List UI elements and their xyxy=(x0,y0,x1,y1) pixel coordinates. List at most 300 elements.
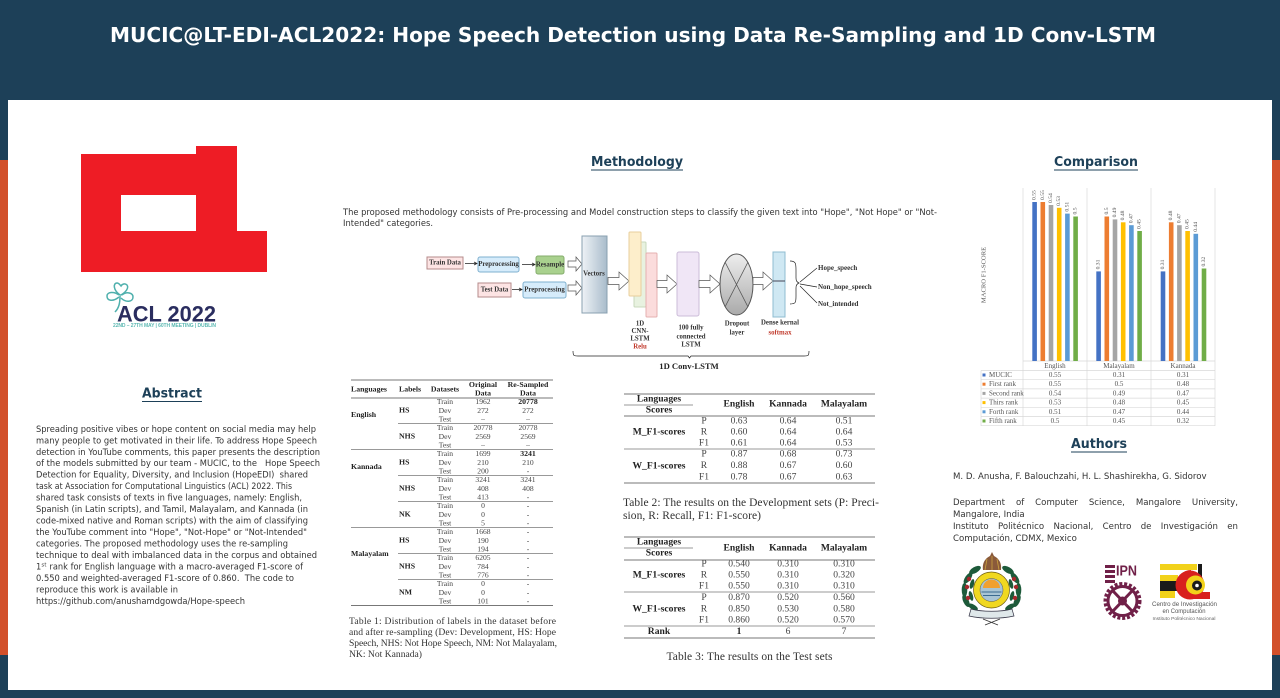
table 3: test results: 0.320 xyxy=(833,570,855,580)
text block: abstract: code-mixed native and Roman scripts) with the aim of classifying xyxy=(36,517,308,527)
table 3: test results: F1 xyxy=(699,580,709,592)
heading: Comparison: Comparison xyxy=(1054,155,1138,170)
label: 1D CNN-LSTM xyxy=(630,320,650,350)
bars: Kannada: 0.45 xyxy=(1185,219,1191,229)
table 3: test results: 0.540 xyxy=(728,558,750,570)
table 2 caption: Table 2: The results on the Development sets (P: Preci- xyxy=(623,497,879,509)
table 2: development results: 0.64 xyxy=(836,426,853,438)
table 1: label distribution: Test xyxy=(439,596,452,606)
table 1: label distribution: 200 xyxy=(477,466,489,476)
table 1: label distribution: NM xyxy=(399,588,413,596)
chart data table xyxy=(982,362,1196,425)
table 3: test results: 0.520 xyxy=(777,592,799,603)
label: 100 fully connected LSTM: LSTM xyxy=(681,342,701,348)
table 1: label distribution: Data xyxy=(520,388,536,398)
bars: Malayalam: 0.48 xyxy=(1120,210,1126,220)
table 1: label distribution: HS xyxy=(399,406,409,414)
table 1: label distribution: 194 xyxy=(477,544,489,554)
table 1 caption xyxy=(349,616,557,660)
table 3: test results: 0.580 xyxy=(833,604,855,614)
table 1: label distribution: 1699 xyxy=(475,449,491,458)
table 1: label distribution: Dev xyxy=(439,510,452,519)
label: 1D CNN-LSTM: Relu xyxy=(633,344,647,350)
label: 100 fully connected LSTM: connected xyxy=(676,334,706,340)
chart data table: 0.55 xyxy=(1049,380,1062,388)
table 3: test results: 0.860 xyxy=(728,614,750,626)
bars: English: 0.5 xyxy=(1073,207,1079,214)
black bars xyxy=(1160,564,1202,591)
table 1: label distribution: HS xyxy=(399,458,409,466)
table 1: label distribution: - xyxy=(527,527,530,536)
text block: abstract: technique to deal with imbalanced data in the corpus and obtained xyxy=(36,551,317,561)
table 1: label distribution: Labels xyxy=(399,384,421,394)
preprocessing box xyxy=(523,282,566,298)
table 3: test results: Kannada xyxy=(769,542,807,554)
table 2: development results: 0.67 xyxy=(780,460,797,471)
text block: abstract: Spreading positive vibes or hope content on social media may help xyxy=(36,425,316,435)
ACL 2022 dates: 22ND – 27TH MAY | 60TH MEETING | DUBLIN xyxy=(113,323,216,329)
table 3: test results: R xyxy=(701,570,708,580)
red C xyxy=(1176,570,1210,599)
table 3: test results: 7 xyxy=(842,626,847,637)
chart data table: English xyxy=(1044,362,1066,370)
table 3: test results: 6 xyxy=(786,626,791,637)
bars: English: 0.53 xyxy=(1056,196,1062,206)
white eye xyxy=(1195,584,1199,587)
table 3: test results: 0.530 xyxy=(777,604,799,614)
table 3: test results: P xyxy=(701,558,707,570)
output labels: Hope_speech xyxy=(818,264,857,272)
table 3: test results: M_F1-scores xyxy=(633,570,686,580)
authors and affiliations text xyxy=(953,472,1238,544)
table 3: test results: 0.310 xyxy=(777,580,799,592)
affiliation: IPN: Instituto Politécnico Nacional, Centro de Investigación en xyxy=(953,522,1238,532)
test data box: Test Data xyxy=(481,286,509,294)
ACL 2022 logo xyxy=(107,283,216,329)
label: 1D Conv-LSTM: 1D Conv-LSTM xyxy=(659,361,719,371)
table 1: label distribution: 408 xyxy=(522,484,534,493)
crown xyxy=(983,552,1001,570)
bars: Malayalam: 0.31 xyxy=(1096,259,1102,269)
bars: Kannada xyxy=(1160,210,1207,361)
text block: abstract: the YouTube comment into "Hope", "Not-Hope" or "Not-Intended" xyxy=(36,528,307,538)
text block: abstract: https://github.com/anushamdgowda/Hope-speech xyxy=(36,597,245,607)
table 1: label distribution: English xyxy=(351,410,377,419)
text block: abstract: 0.550 and weighted-averaged F1-score of 0.860. The code to xyxy=(36,574,294,584)
bars: English: 0.51 xyxy=(1064,202,1070,212)
table 1: label distribution: Dev xyxy=(439,406,452,415)
bars: English: 0.55 xyxy=(1032,190,1038,200)
table 2: development results: 0.61 xyxy=(731,438,748,448)
hollow arrow xyxy=(568,281,582,295)
label: dropout layer: layer xyxy=(730,330,744,336)
table 1: label distribution: - xyxy=(527,501,530,510)
chart data table: 0.45 xyxy=(1177,399,1190,407)
table 3: test results: Scores xyxy=(646,548,672,558)
table 1: label distribution: 1668 xyxy=(475,527,491,536)
chart data table: First rank xyxy=(989,380,1017,388)
resample box xyxy=(536,256,564,274)
heading: Authors: Authors xyxy=(1071,437,1127,452)
text block: abstract: Spanish (in Latin scripts), and Tamil, Malayalam, and Kannada (in xyxy=(36,505,308,515)
table 2: development results: 0.88 xyxy=(731,460,748,471)
label: dense kernal softmax: Dense kernal xyxy=(761,320,799,326)
table 3: test results: Malayalam xyxy=(821,542,867,554)
table 1: label distribution: - xyxy=(527,518,530,528)
black disc xyxy=(1192,580,1202,590)
table 1: label distribution: Languages xyxy=(351,384,387,394)
table 1: label distribution: 408 xyxy=(477,484,489,493)
table 2: development results: 0.64 xyxy=(780,416,797,426)
chart data table: 0.54 xyxy=(1049,389,1062,397)
table 1: label distribution: Dev xyxy=(439,588,452,597)
vectors block xyxy=(582,236,607,313)
table 2: development results: 0.51 xyxy=(836,416,853,426)
table 1: label distribution: Train xyxy=(437,475,453,484)
table 3: test results: 0.310 xyxy=(777,558,799,570)
table 1: label distribution: 210 xyxy=(522,458,534,467)
text block: abstract: detection in YouTube comments, this paper presents the description xyxy=(36,448,320,458)
text block: abstract: 1ˢᵗ rank for English language with a macro-averaged F1-score of xyxy=(36,562,304,572)
table 1: label distribution: Re-Sampled xyxy=(508,380,549,389)
bars: Malayalam: 0.5 xyxy=(1104,207,1110,214)
table 2: development results: 0.67 xyxy=(780,472,797,482)
bars: Kannada: 0.31 xyxy=(1160,259,1166,269)
table 2: development results: P xyxy=(701,448,707,460)
label: 1D CNN-LSTM: LSTM xyxy=(630,336,650,342)
label: 1D CNN-LSTM: 1D xyxy=(636,320,644,328)
chart data table: 0.48 xyxy=(1177,380,1190,388)
table 1: label distribution: 3241 xyxy=(520,475,536,484)
table 1: label distribution: 6205 xyxy=(475,553,491,562)
table 1: label distribution: Train xyxy=(437,397,453,406)
table 1 caption: Speech, NHS: Not Hope Speech, NM: Not Malayalam, xyxy=(349,638,557,649)
table 3: test results: 0.550 xyxy=(728,570,750,580)
label: dropout layer xyxy=(725,320,750,336)
chart data table: 0.44 xyxy=(1177,408,1190,416)
chart data table: MUCIC xyxy=(989,371,1012,379)
chart data table: 0.47 xyxy=(1113,408,1126,416)
table 3: test results: F1 xyxy=(699,614,709,626)
dropout ellipse xyxy=(720,254,753,315)
table 1: label distribution: 20778 xyxy=(474,423,493,432)
table 1: label distribution: 1962 xyxy=(475,397,491,406)
text block: abstract: shared task consists of texts in five languages, namely: English, xyxy=(36,494,302,504)
affiliation: Mangalore: Department of Computer Science, Mangalore University, xyxy=(953,498,1238,508)
table 3: test results: 0.310 xyxy=(777,570,799,580)
chart data table: 0.32 xyxy=(1177,417,1190,425)
table 1: label distribution: Dev xyxy=(439,458,452,467)
author names: M. D. Anusha, F. Balouchzahi, H. L. Shashirekha, G. Sidorov xyxy=(953,472,1207,482)
test data box xyxy=(478,283,511,297)
table 1: label distribution: Dev xyxy=(439,536,452,545)
bars: Malayalam: 0.47 xyxy=(1128,213,1134,223)
chart data table: Kannada xyxy=(1171,362,1196,370)
arrow xyxy=(522,263,535,266)
table 1: label distribution: Data xyxy=(475,388,491,398)
label: dense kernal softmax xyxy=(761,320,799,336)
CIC wordmark xyxy=(1152,602,1217,622)
model architecture diagram xyxy=(427,232,872,371)
table 1: label distribution: Train xyxy=(437,423,453,432)
CIC wordmark: Centro de Investigación xyxy=(1152,602,1217,608)
gear center xyxy=(1113,591,1132,611)
chart data table: Thirs rank xyxy=(989,399,1018,407)
bars: English: 0.55 xyxy=(1040,190,1046,200)
table 1: label distribution: 20778 xyxy=(519,423,538,432)
table 1: label distribution: - xyxy=(527,536,530,545)
table 2: development results: Kannada xyxy=(769,398,807,410)
bar chart: macro F1-score comparison xyxy=(980,188,1215,426)
crossed stems xyxy=(983,619,1000,625)
output brace xyxy=(790,261,799,304)
table 1 caption: NK: Not Kannada) xyxy=(349,649,422,660)
table 1 caption: and after re-sampling (Dev: Development, HS: Hope xyxy=(349,627,556,638)
table 3: test results: Rank xyxy=(648,626,671,637)
table 1: label distribution: 0 xyxy=(481,510,485,519)
berries xyxy=(965,577,1018,600)
table 3: test results: 0.850 xyxy=(728,604,750,614)
table 2: development results: W_F1-scores xyxy=(632,460,686,472)
chart data table: 0.31 xyxy=(1113,371,1126,379)
table 2: development results: P xyxy=(701,416,707,426)
green layer xyxy=(634,242,646,307)
table 1: label distribution: Train xyxy=(437,527,453,536)
table 1: label distribution: Test xyxy=(439,544,452,554)
chart data table: 0.31 xyxy=(1177,371,1190,379)
table 3: test results: R xyxy=(701,604,708,614)
table 1: label distribution: 210 xyxy=(477,458,489,467)
table 3: test results: Languages xyxy=(637,536,681,548)
train data box xyxy=(427,257,463,269)
table 1: label distribution: Dev xyxy=(439,432,452,441)
preprocessing box xyxy=(478,257,519,272)
table 1: label distribution: - xyxy=(527,510,530,519)
table 3 caption: Table 3: The results on the Test sets xyxy=(666,651,833,663)
train data box: Train Data xyxy=(429,260,461,266)
table 1: label distribution: 3241 xyxy=(520,449,536,458)
affiliation: IPN continued: Computación, CDMX, Mexico xyxy=(953,534,1077,544)
table 2: development results: 0.60 xyxy=(731,426,748,438)
table 1: label distribution: - xyxy=(527,596,530,606)
inner seal xyxy=(980,578,1003,602)
text block: methodology intro: The proposed methodology consists of Pre-processing and Model construction steps to classify the given text into "Hope", "Not Hope" or "Not- xyxy=(342,208,937,218)
table 1: label distribution: Dev xyxy=(439,484,452,493)
bars: Kannada: 0.47 xyxy=(1176,213,1182,223)
table 2 caption xyxy=(623,497,879,522)
text block: abstract: categories. The proposed methodology uses the re-sampling xyxy=(36,540,288,550)
table 3: test results: 1 xyxy=(737,626,742,637)
yellow seal xyxy=(974,572,1010,608)
bars: English xyxy=(1032,190,1079,361)
output labels: Non_hope_speech xyxy=(818,283,872,291)
table 1: label distribution: Test xyxy=(439,414,452,424)
chart data table: 0.48 xyxy=(1113,399,1126,407)
table 1: label distribution: Test xyxy=(439,466,452,476)
chart data table: 0.45 xyxy=(1113,417,1126,425)
hollow arrow xyxy=(657,275,677,293)
chart data table: 0.51 xyxy=(1049,408,1062,416)
table 1: label distribution: Train xyxy=(437,579,453,588)
bars: Malayalam xyxy=(1096,207,1143,361)
title: MUCIC@LT-EDI-ACL2022: Hope Speech Detection using Data Re-Sampling and 1D Conv-LSTM xyxy=(110,23,1156,47)
table 1: label distribution: Malayalam xyxy=(351,549,389,558)
table 2: development results: M_F1-scores xyxy=(633,426,686,438)
ACL 2022 wordmark: ACL 2022 xyxy=(117,302,216,326)
output labels xyxy=(818,264,872,308)
label: dense kernal softmax: softmax xyxy=(768,330,792,336)
chart data table: 0.53 xyxy=(1049,399,1062,407)
table 1: label distribution: NHS xyxy=(399,432,415,440)
table 3: test results: 0.520 xyxy=(777,614,799,626)
table 1: label distribution: 190 xyxy=(477,536,489,545)
table 2: development results: 0.63 xyxy=(836,472,853,482)
table 1: label distribution: Test xyxy=(439,570,452,580)
table 3: test results: 0.870 xyxy=(728,592,750,603)
gear xyxy=(1106,584,1140,618)
table 1: label distribution: Test xyxy=(439,518,452,528)
table 1: label distribution: Datasets xyxy=(431,384,459,394)
table 2: development results xyxy=(624,394,875,483)
heading: Methodology: Methodology xyxy=(591,155,684,170)
table 2: development results: R xyxy=(701,426,708,438)
table 3: test results: 0.310 xyxy=(833,580,855,592)
table 1: label distribution: Test xyxy=(439,492,452,502)
text block: abstract: of the models submitted by our team - MUCIC, to the Hope Speech xyxy=(36,459,320,469)
arrow xyxy=(465,262,477,265)
table 3: test results xyxy=(624,536,875,638)
table 2: development results: 0.64 xyxy=(780,438,797,448)
text block: abstract xyxy=(36,425,320,607)
CIC wordmark: en Computación xyxy=(1162,609,1206,615)
table 2: development results: 0.68 xyxy=(780,448,797,460)
bars: Kannada: 0.44 xyxy=(1193,222,1199,232)
table 1: label distribution: NHS xyxy=(399,484,415,492)
hollow arrow xyxy=(699,275,720,293)
table 1: label distribution: - xyxy=(527,466,530,476)
table 1: label distribution: - xyxy=(527,579,530,588)
table 1: label distribution: Train xyxy=(437,501,453,510)
table 2: development results: 0.78 xyxy=(731,472,748,482)
chart data table: 0.5 xyxy=(1051,417,1060,425)
text block: abstract: reproduce this work is available in xyxy=(36,585,178,595)
dense layer xyxy=(773,252,785,317)
icon: red MUCIC logo xyxy=(81,146,267,272)
text block: abstract: Detection for Equality, Diversity, and Inclusion (HopeEDI) shared xyxy=(36,471,308,481)
icon: shamrock xyxy=(107,283,133,312)
table 1: label distribution: 5 xyxy=(481,518,485,528)
affiliation: Mangalore continued: Mangalore, India xyxy=(953,510,1025,520)
bars: Kannada: 0.48 xyxy=(1168,210,1174,220)
table 1: label distribution: 776 xyxy=(477,570,489,580)
preprocessing box: Preprocessing xyxy=(478,261,519,268)
output labels: Not_intended xyxy=(818,300,859,308)
table 1: label distribution: 101 xyxy=(477,596,489,606)
hollow arrow xyxy=(608,272,629,290)
table 1: label distribution: 0 xyxy=(481,588,485,597)
table 3: test results: P xyxy=(701,592,707,603)
table 1: label distribution: Train xyxy=(437,449,453,458)
text block: methodology intro: Intended" categories. xyxy=(343,219,433,229)
hollow arrow xyxy=(568,257,582,271)
table 1: label distribution: Test xyxy=(439,440,452,450)
label: 100 fully connected LSTM: 100 fully xyxy=(678,324,704,332)
table 2: development results: 0.60 xyxy=(836,460,853,471)
table 1: label distribution: - xyxy=(527,544,530,554)
table 3: test results: 0.310 xyxy=(833,558,855,570)
table 1: label distribution: 2569 xyxy=(475,432,491,441)
table 1: label distribution xyxy=(351,380,553,606)
table 2: development results: 0.53 xyxy=(836,438,853,448)
chart data table: Forth rank xyxy=(989,408,1019,416)
table 1: label distribution: - xyxy=(527,553,530,562)
text block: methodology intro xyxy=(342,208,937,229)
table 3: test results: 0.570 xyxy=(833,614,855,626)
table 2: development results: R xyxy=(701,460,708,471)
output arrows xyxy=(800,268,817,303)
table 2: development results: 0.73 xyxy=(836,448,853,460)
right wreath leaves xyxy=(1001,564,1022,612)
table 2: development results: F1 xyxy=(699,438,709,448)
resample box: Resample xyxy=(536,262,564,268)
chart data table: Second rank xyxy=(989,389,1024,397)
table 1: label distribution: Kannada xyxy=(351,462,382,471)
bars: Malayalam: 0.49 xyxy=(1112,207,1118,217)
logo: Mangalore University emblem xyxy=(961,552,1022,625)
table 1: label distribution: 0 xyxy=(481,501,485,510)
table 2: development results: 0.64 xyxy=(780,426,797,438)
table 2: development results: Languages xyxy=(637,394,681,404)
chart data table: 0.47 xyxy=(1177,389,1190,397)
chart data table: 0.55 xyxy=(1049,371,1062,379)
table 1: label distribution: 784 xyxy=(477,562,489,571)
logo: IPN xyxy=(1105,562,1140,618)
table 1: label distribution: – xyxy=(525,414,530,424)
bars: Kannada: 0.32 xyxy=(1201,257,1207,266)
yellow disc xyxy=(1186,576,1205,594)
hollow arrow xyxy=(753,272,773,290)
arrow xyxy=(512,288,522,291)
heading: Abstract: Abstract xyxy=(142,386,202,402)
label: dropout layer: Dropout xyxy=(725,320,750,328)
table 1: label distribution: 20778 xyxy=(518,397,538,406)
table 2: development results: Malayalam xyxy=(821,398,867,410)
table 1: label distribution: – xyxy=(525,440,530,450)
pink layer xyxy=(646,253,657,317)
chart data table: 0.49 xyxy=(1113,389,1126,397)
table 1: label distribution: 2569 xyxy=(520,432,536,441)
table 1 caption: Table 1: Distribution of labels in the dataset before xyxy=(349,616,556,627)
table 1: label distribution: - xyxy=(527,570,530,580)
table 2: development results: 0.87 xyxy=(731,448,748,460)
vectors block: Vectors xyxy=(583,270,605,278)
striped column xyxy=(1105,565,1115,583)
table 2: development results: English xyxy=(724,398,755,410)
table 2: development results: Scores xyxy=(646,404,672,416)
label: 1D CNN-LSTM: CNN- xyxy=(632,328,649,335)
table 2: development results: F1 xyxy=(699,472,709,482)
table 2 caption: sion, R: Recall, F1: F1-score) xyxy=(623,510,761,522)
table 2: development results: 0.63 xyxy=(731,416,748,426)
bottom brace xyxy=(573,351,809,358)
logo: CIC xyxy=(1152,564,1217,622)
label: 100 fully connected LSTM xyxy=(676,324,706,348)
table 1: label distribution: - xyxy=(527,492,530,502)
IPN letters: IPN xyxy=(1116,562,1137,580)
table 1: label distribution: – xyxy=(480,440,485,450)
table 1: label distribution: Dev xyxy=(439,562,452,571)
chart data table: Fifth rank xyxy=(989,417,1017,425)
